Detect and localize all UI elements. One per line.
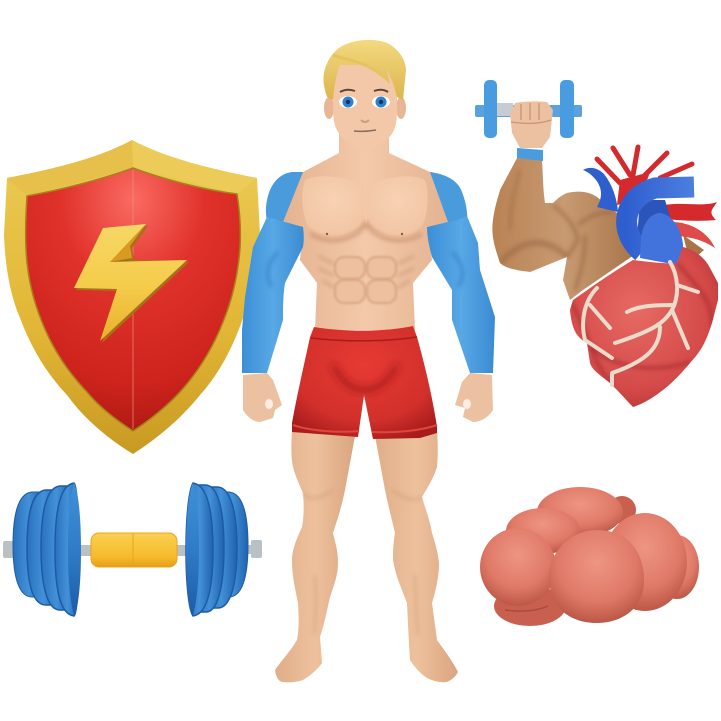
legs — [275, 430, 458, 682]
shorts — [292, 326, 437, 439]
head — [323, 40, 406, 148]
icon: shield with lightning bolt — [4, 140, 260, 454]
icon: flexed arm with dumbbell — [475, 80, 637, 300]
icon: anatomical heart — [570, 147, 718, 407]
heart body — [570, 247, 718, 407]
hands — [243, 373, 493, 422]
icon: muscle lumps — [480, 487, 699, 626]
icon: dumbbell lower left — [3, 483, 262, 616]
heart vessels — [583, 147, 717, 265]
torso — [283, 130, 448, 330]
upper arms: blue deltoids — [266, 172, 467, 230]
forearms: blue sleeves — [242, 216, 495, 373]
figure: muscular man — [242, 40, 495, 682]
